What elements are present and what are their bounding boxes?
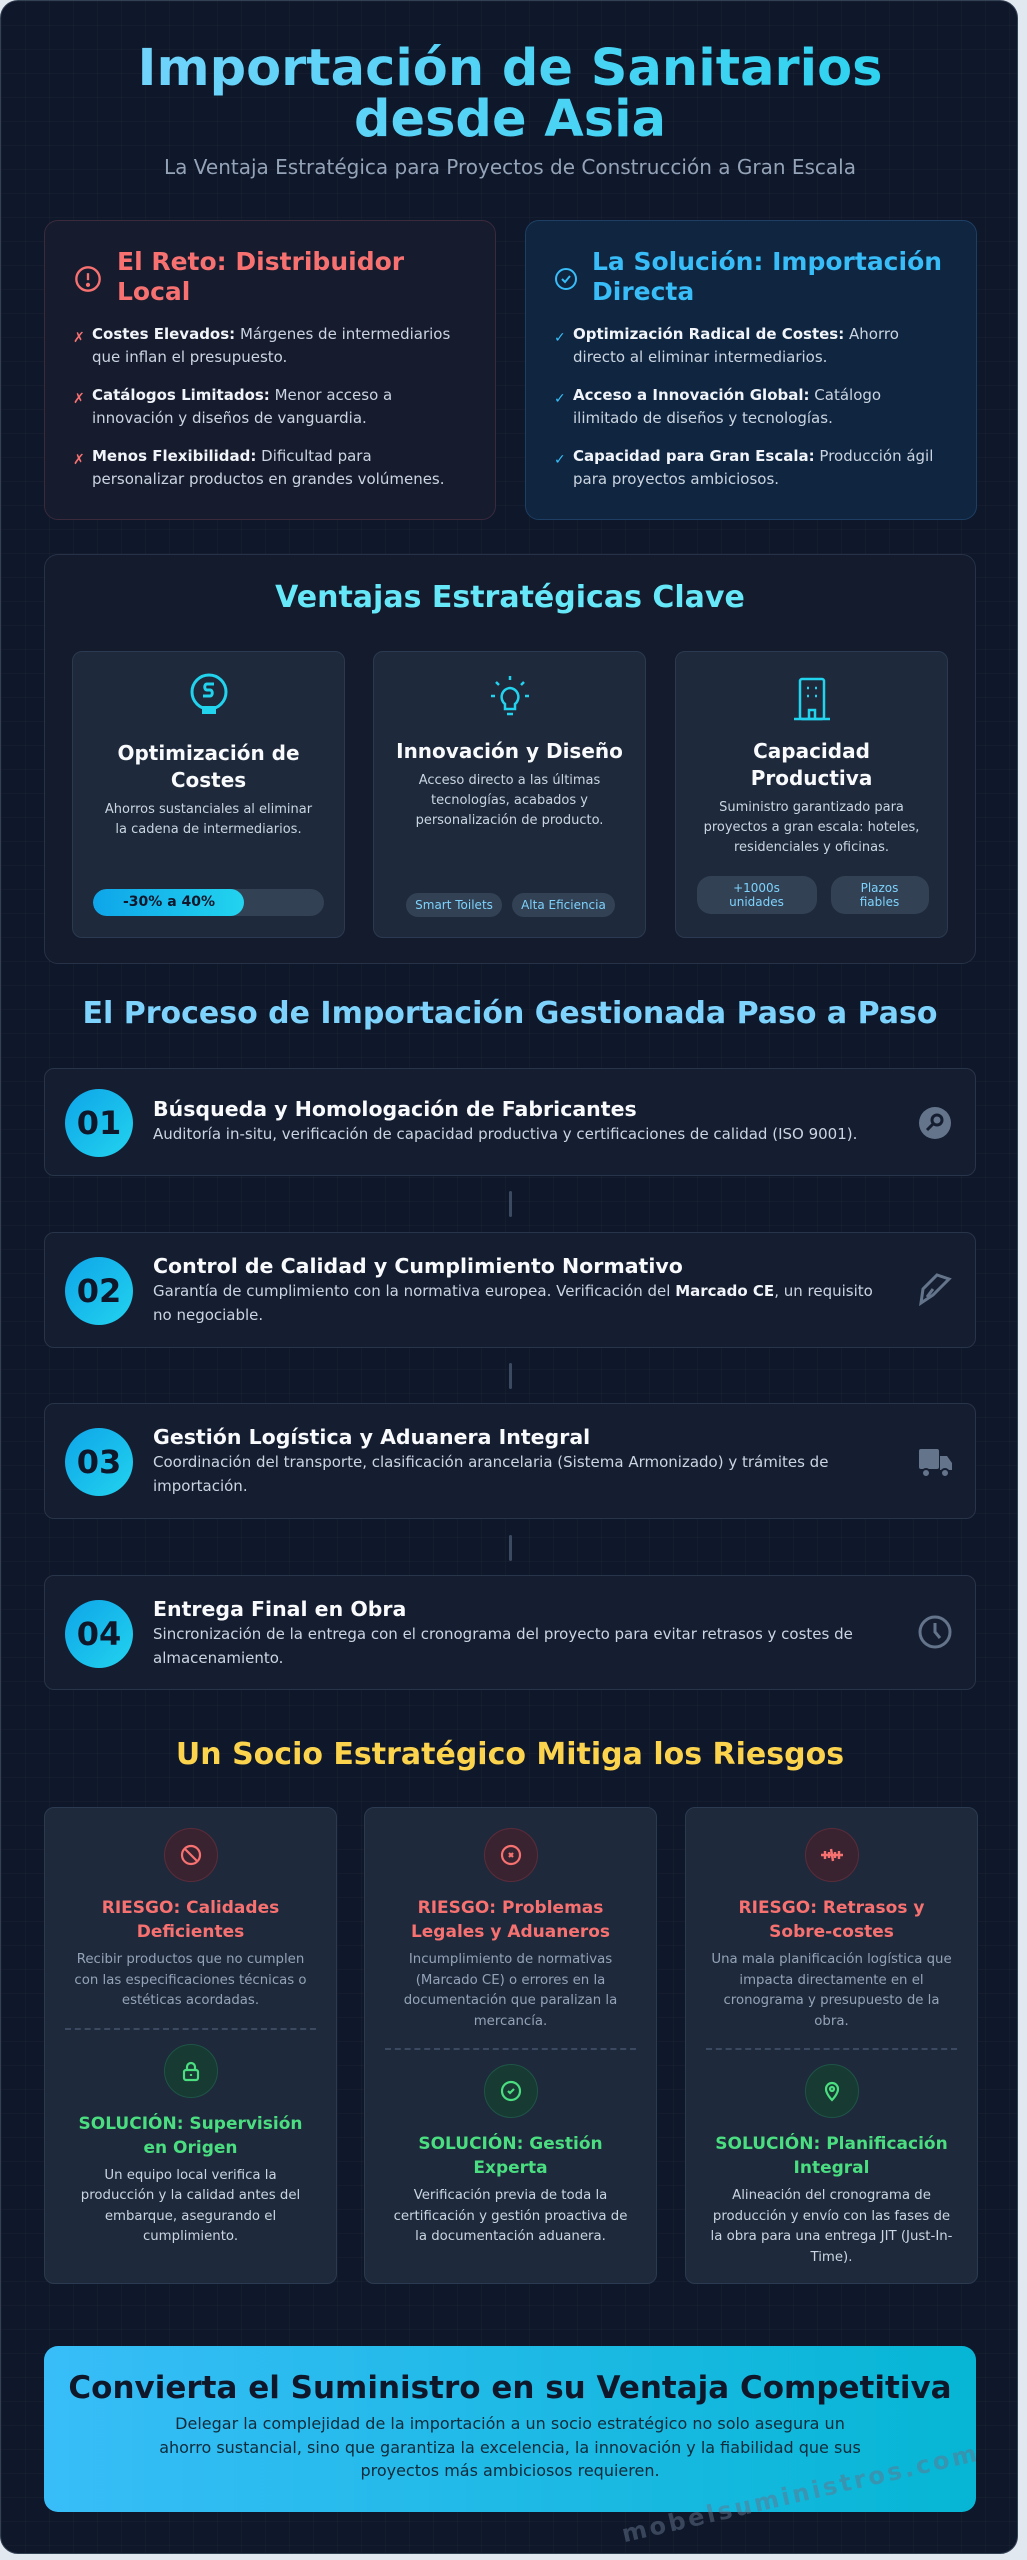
icon: bulb [491,676,529,716]
subtitle: La Ventaja Estratégica para Proyectos de Construcción a Gran Escala [164,155,856,179]
tags [697,876,929,914]
progress bar [93,889,324,916]
list: solucion: Acceso a Innovación Global: Catálogo ilimitado de diseños y tecnologías. [573,386,881,427]
step 04: Entrega Final en Obra [153,1597,406,1621]
callout: cta: Delegar la complejidad de la importación a un socio estratégico no solo asegura un [175,2414,845,2433]
title: desde Asia [354,90,666,149]
step 04: Sincronización de la entrega con el cronograma del proyecto para evitar retrasos y costes de almacenamiento. [153,1625,853,1667]
icon: lock [164,2044,218,2098]
list: solucion: ✓ [554,330,566,346]
step 04: 04 [77,1615,121,1653]
risk card 2: RIESGO: Problemas Legales y Aduaneros [411,1898,610,1942]
icon: ban [164,1828,218,1882]
step 03: Gestión Logística y Aduanera Integral [153,1425,590,1449]
card: capacidad [675,651,948,938]
risk card 1: SOLUCIÓN: Supervisión en Origen [78,2114,302,2158]
list: reto: ✗ [73,452,85,468]
callout: cta [44,2346,976,2512]
heading: reto: El Reto: Distribuidor [117,247,404,276]
step 03 [44,1403,976,1519]
title: Importación de Sanitarios [137,39,883,98]
panel: la solucion [525,220,977,520]
tags: Alta Eficiencia [521,898,606,912]
panel: ventajas [44,554,976,964]
icon: tag [919,1273,952,1306]
callout: cta: Convierta el Suministro en su Ventaja Competitiva [68,2370,952,2406]
progress bar: -30% a 40% [123,894,215,910]
panel: el reto [44,220,496,520]
list: reto [73,325,450,488]
list: solucion: Optimización Radical de Costes: Ahorro directo al eliminar intermediarios. [573,325,899,366]
risk card 1: Un equipo local verifica la producción y la calidad antes del embarque, asegurando el cumplimiento. [81,2168,300,2244]
step 02: Control de Calidad y Cumplimiento Normativo [153,1254,683,1278]
icon: pin [804,2064,858,2118]
risk card 3: Una mala planificación logística que [711,1952,952,1967]
heading: proceso: El Proceso de Importación Gestionada Paso a Paso [82,996,938,1031]
icon: money [190,674,228,714]
risk card 1 [44,1807,337,2284]
card: capacidad: Productiva [751,766,872,790]
list: reto: Costes Elevados: Márgenes de intermediarios que inflan el presupuesto. [92,325,450,366]
card: innovacion: Innovación y Diseño [396,739,623,763]
card: costes [72,651,345,938]
list: solucion: ✓ [554,452,566,468]
tags: Smart Toilets [415,898,493,912]
risk card 2: SOLUCIÓN: Gestión Experta [418,2134,603,2178]
tags: unidades [729,895,784,909]
icon: check-circle [484,2064,538,2118]
tags: fiables [860,895,899,909]
tags: +1000s [733,881,780,895]
risk card 2: Incumplimiento de normativas (Marcado CE) o errores en la documentación que paralizan la mercancía. [404,1952,617,2028]
risk card 3: impacta directamente en el [739,1972,924,1988]
card: costes: Ahorros sustanciales al eliminar la cadena de intermediarios. [105,802,312,837]
icon: delay [804,1828,858,1882]
list: reto: ✗ [73,330,85,346]
card: capacidad: Suministro garantizado para proyectos a gran escala: hoteles, residenciales y oficinas. [704,800,919,855]
risk card 3 [685,1807,978,2284]
list: reto: Catálogos Limitados: Menor acceso a innovación y diseños de vanguardia. [92,386,392,427]
step 03: Coordinación del transporte, clasificación arancelaria (Sistema Armonizado) y trámites de importación. [153,1453,828,1495]
step 03: 03 [77,1443,121,1481]
icon: building [794,678,830,720]
risk card 3: cronograma y presupuesto de la [723,1993,940,2008]
callout: cta: proyectos más ambiciosos requieren. [360,2461,660,2480]
card: innovacion [373,651,646,938]
risk card 1: Recibir productos que no cumplen con las especificaciones técnicas o estéticas acordadas. [74,1952,307,2008]
heading: riesgos: Un Socio Estratégico Mitiga los Riesgos [176,1737,844,1772]
title [1,43,1019,145]
card: innovacion: Acceso directo a las últimas tecnologías, acabados y personalización de producto. [416,773,603,828]
heading: solucion [592,247,942,306]
step 02 [44,1232,976,1348]
list: solucion: ✓ [554,391,566,407]
callout: cta: ahorro sustancial, sino que garantiza la excelencia, la innovación y la fiabilidad que sus [159,2438,861,2456]
step 04 [44,1575,976,1690]
risk card 3: RIESGO: Retrasos y Sobre-costes [739,1898,924,1942]
card: costes: Costes [171,768,246,792]
step 02: 02 [77,1272,121,1310]
list: reto: Menos Flexibilidad: Dificultad para personalizar productos en grandes volúmenes. [92,447,445,488]
icon: search [919,1107,951,1139]
tags [406,893,615,917]
card: costes: Optimización de [117,741,300,765]
risk card 3: obra. [814,2014,849,2028]
icon: x-circle [484,1828,538,1882]
risk card 3: SOLUCIÓN: Planificación Integral [715,2134,948,2178]
step 02: Garantía de cumplimiento con la normativa europea. Verificación del Marcado CE, un requisito no negociable. [153,1282,873,1324]
tags: Plazos [861,881,898,895]
icon: clock [918,1616,952,1648]
step 01: Búsqueda y Homologación de Fabricantes [153,1097,637,1121]
step 01: 01 [77,1104,121,1142]
list: solucion [554,325,933,488]
icon: truck [919,1449,952,1476]
icon: check [555,268,577,290]
heading: reto [117,247,404,306]
heading: reto: Local [117,277,190,306]
heading: solucion: La Solución: Importación [592,247,942,276]
heading: ventajas: Ventajas Estratégicas Clave [275,580,745,615]
icon: warning [75,266,101,292]
step 01 [44,1068,976,1176]
risk card 2: Verificación previa de toda la certificación y gestión proactiva de la documentación aduanera. [394,2188,627,2244]
risk card 3: Alineación del cronograma de producción y envío con las fases de la obra para una entrega JIT (Just-In-Time). [711,2188,952,2264]
list: solucion: Capacidad para Gran Escala: Producción ágil para proyectos ambiciosos. [573,447,933,488]
risk card 1: RIESGO: Calidades Deficientes [102,1898,279,1942]
card: capacidad: Capacidad [753,739,870,763]
step 01: Auditoría in-situ, verificación de capacidad productiva y certificaciones de calidad (ISO 9001). [153,1125,857,1143]
list: reto: ✗ [73,391,85,407]
watermark: mobelsuministros.com [619,2439,982,2548]
heading: solucion: Directa [592,277,694,306]
risk card 2 [364,1807,657,2284]
